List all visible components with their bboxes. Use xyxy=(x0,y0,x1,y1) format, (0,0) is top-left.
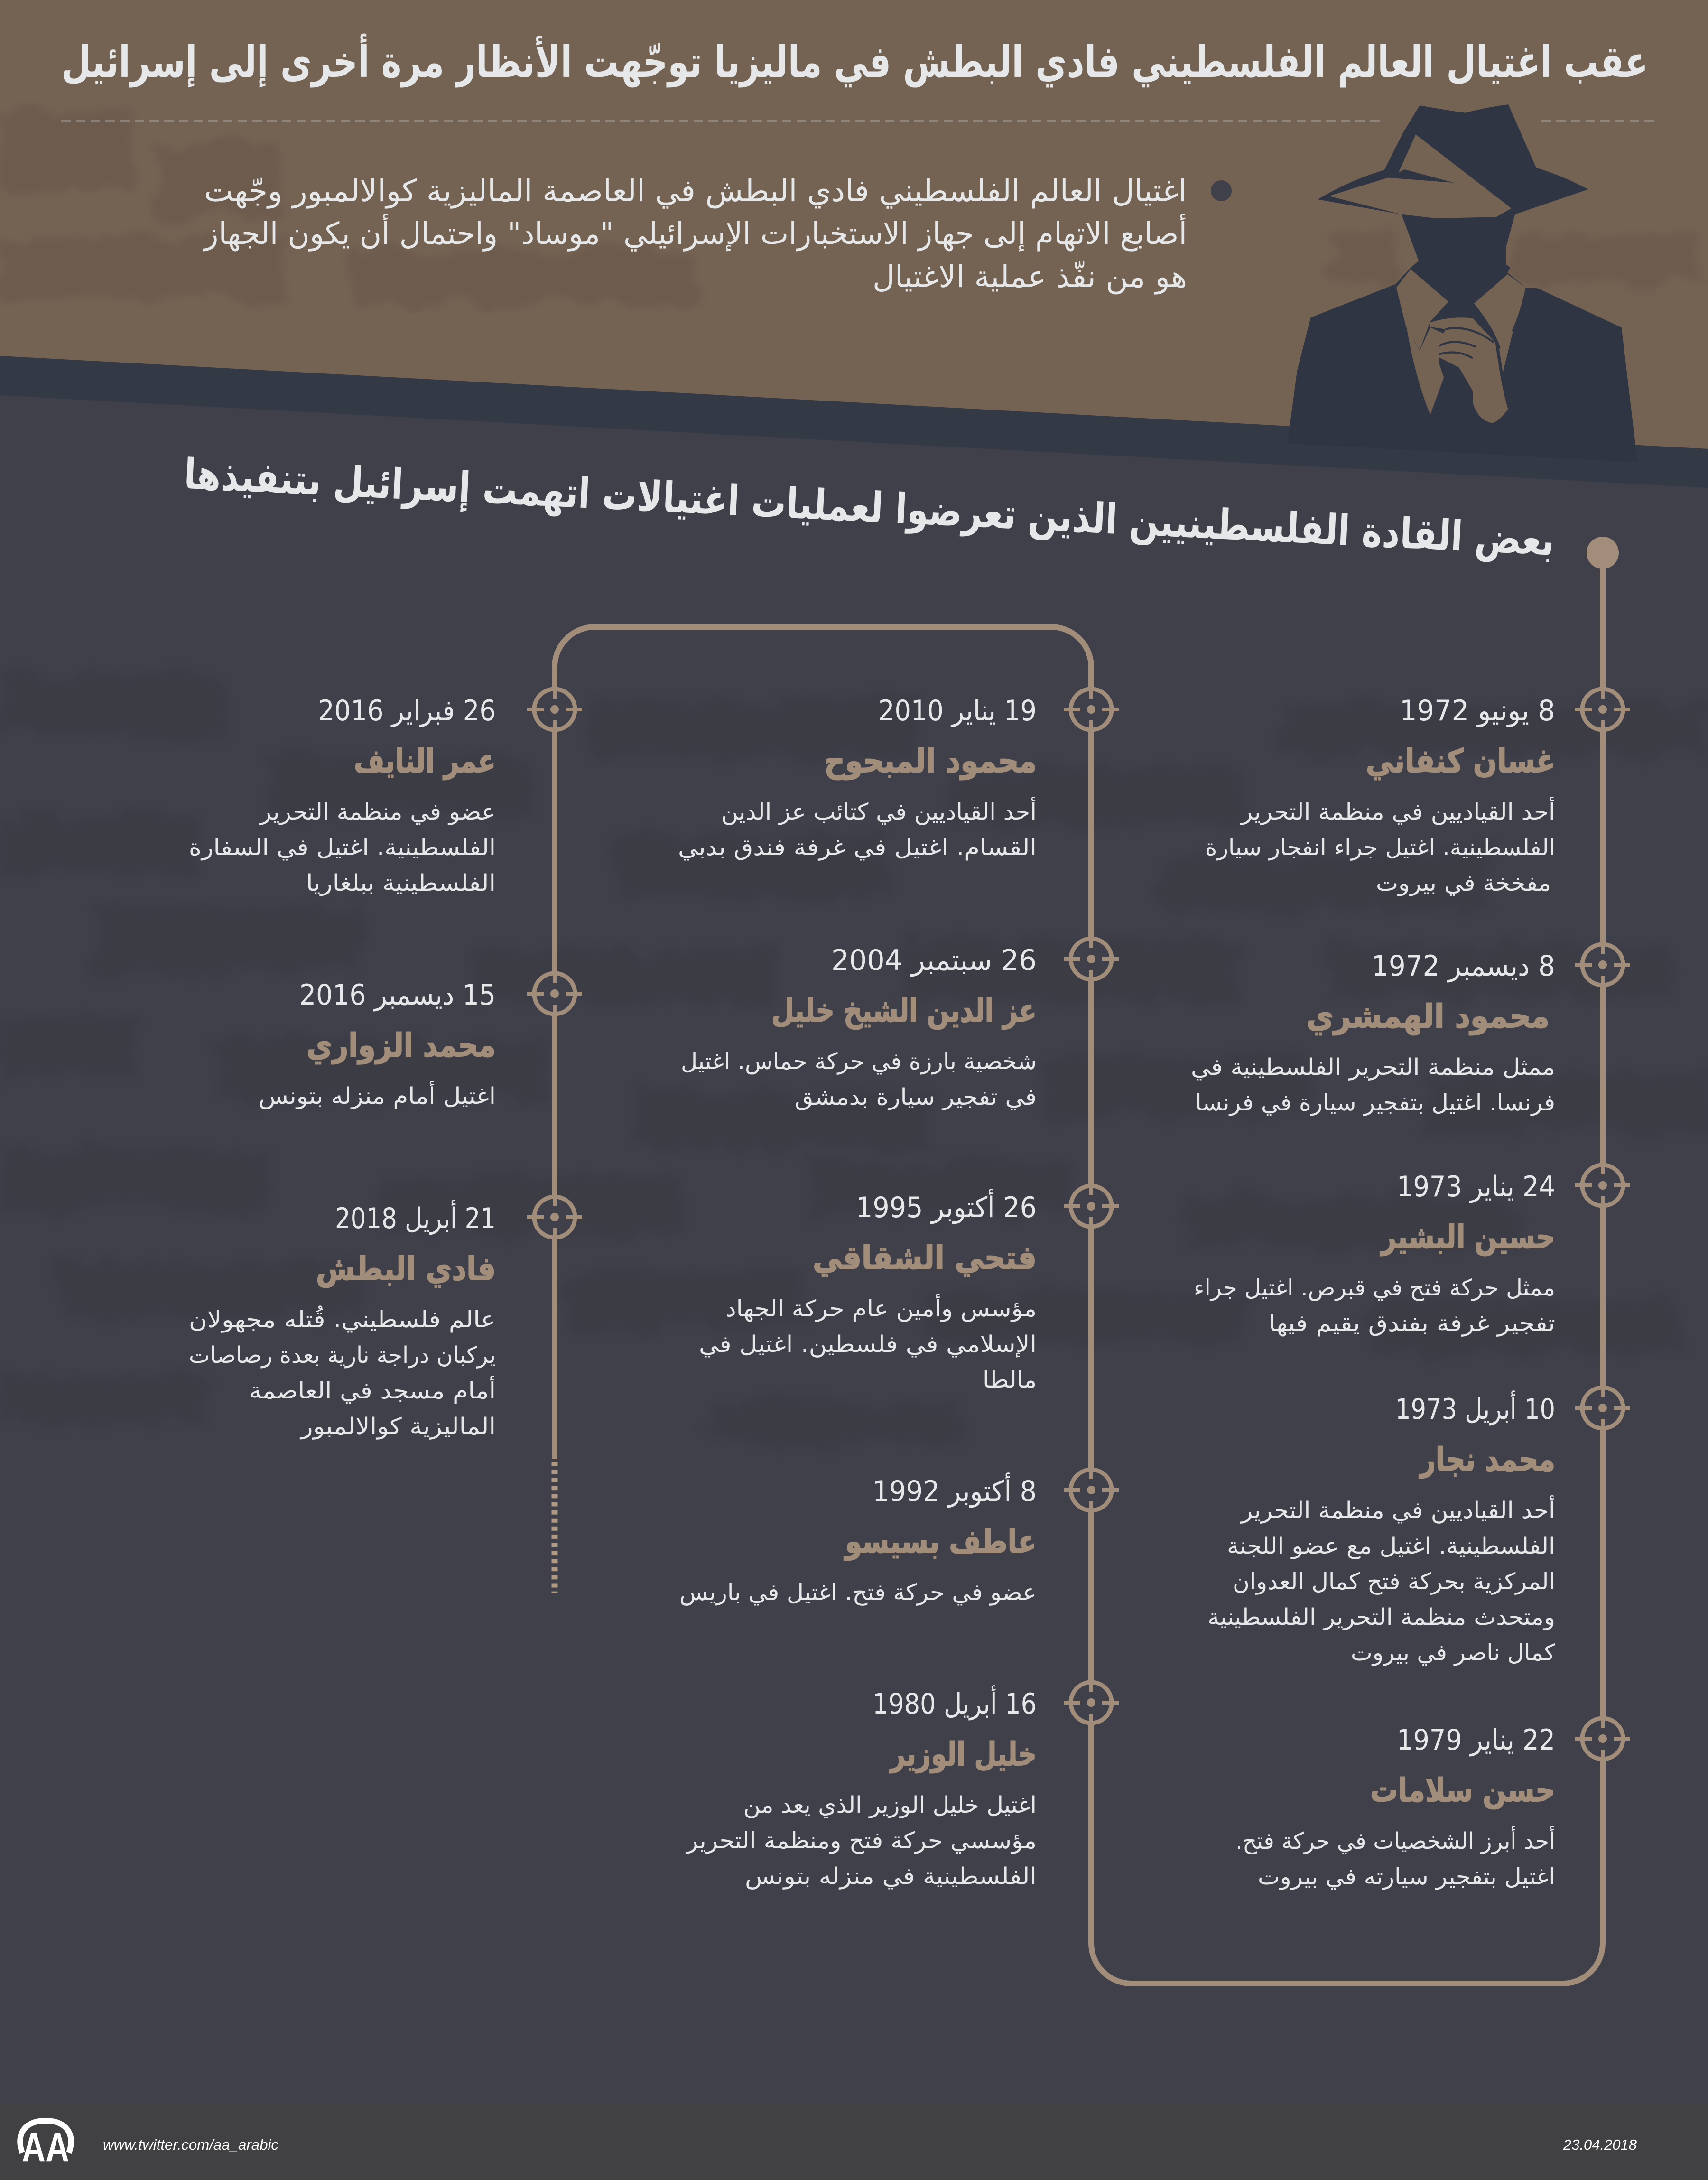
footer date: 23.04.2018 xyxy=(1563,2136,1637,2153)
entry: Khalil al-Wazir: اغتيل خليل الوزير الذي يعد من xyxy=(743,1792,1037,1818)
entry: Mahmoud Hamshari: محمود الهمشري xyxy=(1306,998,1550,1035)
entry: Ghassan Kanafani xyxy=(1205,694,1555,896)
entry: Hassan Salameh: اغتيل بتفجير سيارته في بيروت xyxy=(1258,1863,1555,1890)
footer band xyxy=(0,2103,1708,2180)
entry: Mahmoud Hamshari: 8 ديسمبر 1972 xyxy=(1372,950,1555,983)
entry: Izz al-Din Khalil: في تفجير سيارة بدمشق xyxy=(795,1084,1037,1110)
entry: Mohamed Zouari: 15 ديسمبر 2016 xyxy=(299,978,496,1012)
panel: brown header xyxy=(0,0,1708,449)
entry: Mohamed Zouari: محمد الزواري xyxy=(306,1027,496,1064)
entry: Hussein al-Bashir: تفجير غرفة بفندق يقيم فيها xyxy=(1269,1310,1555,1337)
entry: Fadi al-Batsh xyxy=(189,1200,496,1440)
entry: Ghassan Kanafani: الفلسطينية. اغتيل جراء انفجار سيارة xyxy=(1205,834,1555,861)
entry: Fathi Shaqaqi: 26 أكتوبر 1995 xyxy=(856,1189,1037,1224)
entry: Fadi al-Batsh: أمام مسجد في العاصمة xyxy=(249,1376,496,1404)
entry: Khalil al-Wazir: مؤسسي حركة فتح ومنظمة التحرير xyxy=(686,1827,1037,1854)
entry: Hussein al-Bashir: ممثل حركة فتح في قبرص. اغتيل جراء xyxy=(1194,1275,1555,1301)
icon: spy silhouette xyxy=(1288,104,1637,462)
entry: Hussein al-Bashir xyxy=(1194,1170,1555,1337)
dark brick texture xyxy=(0,674,1708,1447)
entry: Fathi Shaqaqi: الإسلامي في فلسطين. اغتيل في xyxy=(699,1331,1037,1358)
entry: Muhammad Najjar: أحد القياديين في منظمة التحرير xyxy=(1240,1495,1555,1524)
entry: Mahmoud al-Mabhouh: القسام. اغتيل في غرفة فندق بدبي xyxy=(678,834,1037,861)
entry: Mahmoud al-Mabhouh: محمود المبحوح xyxy=(824,743,1037,780)
entry: Atef Bseiso: 8 أكتوبر 1992 xyxy=(873,1472,1037,1508)
entry: Fathi Shaqaqi: فتحي الشقاقي xyxy=(813,1239,1037,1277)
entry: Fadi al-Batsh: عالم فلسطيني. قُتله مجهولان xyxy=(189,1305,496,1333)
entry: Fathi Shaqaqi: مؤسس وأمين عام حركة الجهاد xyxy=(725,1294,1037,1322)
entry: Izz al-Din Khalil: شخصية بارزة في حركة حماس. اغتيل xyxy=(681,1048,1037,1075)
entry: Hussein al-Bashir: حسين البشير xyxy=(1380,1219,1555,1256)
intro text with bullet: اغتيال العالم الفلسطيني فادي البطش في العاصمة الماليزية كوالالمبور وجّهت xyxy=(204,174,1187,209)
entry: Fadi al-Batsh: 21 أبريل 2018 xyxy=(335,1200,496,1235)
entry: Omar Nayef: الفلسطينية. اغتيل في السفارة xyxy=(189,834,496,861)
entry: Izz al-Din Khalil: 26 سبتمبر 2004 xyxy=(831,944,1037,977)
entry: Hassan Salameh: أحد أبرز الشخصيات في حركة فتح. xyxy=(1235,1826,1555,1854)
timeline markers xyxy=(527,688,1630,1760)
entry: Atef Bseiso: عاطف بسيسو xyxy=(844,1523,1037,1561)
entry: Mahmoud al-Mabhouh: 19 يناير 2010 xyxy=(878,694,1037,727)
entry: Omar Nayef xyxy=(189,694,496,896)
entry: Mohamed Zouari xyxy=(259,978,496,1109)
entry: Ghassan Kanafani: غسان كنفاني xyxy=(1366,743,1555,780)
diagonal navy band xyxy=(0,356,1708,488)
entry: Ghassan Kanafani: 8 يونيو 1972 xyxy=(1400,694,1555,727)
entry: Muhammad Najjar: 10 أبريل 1973 xyxy=(1395,1390,1555,1426)
entry: Ghassan Kanafani: مفخخة في بيروت xyxy=(1376,870,1551,896)
entry: Fadi al-Batsh: فادي البطش xyxy=(316,1250,496,1288)
icon: AA logo: AA xyxy=(22,2125,69,2171)
entry: Muhammad Najjar: الفلسطينية. اغتيل مع عضو اللجنة xyxy=(1227,1533,1555,1559)
entry: Muhammad Najjar: المركزية بحركة فتح كمال العدوان xyxy=(1233,1568,1555,1595)
entry: Hassan Salameh: 22 يناير 1979 xyxy=(1397,1724,1555,1757)
entry: Omar Nayef: عضو في منظمة التحرير xyxy=(259,799,496,825)
entry: Mahmoud al-Mabhouh: أحد القياديين في كتائب عز الدين xyxy=(721,797,1037,825)
entry: Khalil al-Wazir: 16 أبريل 1980 xyxy=(873,1685,1037,1721)
entry: Muhammad Najjar: ومتحدث منظمة التحرير الفلسطينية xyxy=(1207,1604,1555,1630)
entry: Omar Nayef: الفلسطينية ببلغاريا xyxy=(306,870,496,896)
entry: Muhammad Najjar: محمد نجار xyxy=(1419,1441,1555,1479)
entry: Atef Bseiso xyxy=(679,1472,1037,1606)
intro text with bullet xyxy=(203,174,1232,295)
entry: Hassan Salameh: حسن سلامات xyxy=(1370,1772,1555,1809)
entry: Hassan Salameh xyxy=(1235,1724,1555,1890)
entry: Fadi al-Batsh: يركبان دراجة نارية بعدة رصاصات xyxy=(189,1342,496,1369)
entry: Mahmoud Hamshari: ممثل منظمة التحرير الفلسطينية في xyxy=(1191,1054,1555,1081)
entry: Khalil al-Wazir xyxy=(686,1685,1037,1890)
entry: Mahmoud al-Mabhouh xyxy=(678,694,1037,861)
entry: Omar Nayef: 26 فبراير 2016 xyxy=(318,694,496,727)
timeline path xyxy=(555,537,1619,1984)
entry: Khalil al-Wazir: الفلسطينية في منزله بتونس xyxy=(745,1863,1037,1890)
entry: Muhammad Najjar xyxy=(1207,1390,1555,1666)
entry: Fathi Shaqaqi xyxy=(699,1189,1037,1393)
entry: Khalil al-Wazir: خليل الوزير xyxy=(890,1736,1037,1773)
footer link: www.twitter.com/aa_arabic xyxy=(103,2136,278,2153)
entry: Fadi al-Batsh: الماليزية كوالالمبور xyxy=(300,1413,496,1440)
entry: Mahmoud Hamshari xyxy=(1191,950,1555,1116)
entry: Omar Nayef: عمر النايف xyxy=(354,743,496,780)
entry: Mahmoud Hamshari: فرنسا. اغتيل بتفجير سيارة في فرنسا xyxy=(1195,1090,1555,1116)
intro text with bullet: أصابع الاتهام إلى جهاز الاستخبارات الإسرائيلي "موساد" واحتمال أن يكون الجهاز xyxy=(203,214,1187,252)
entry: Hussein al-Bashir: 24 يناير 1973 xyxy=(1397,1170,1555,1203)
entry: Izz al-Din Khalil xyxy=(681,944,1037,1110)
entry: Muhammad Najjar: كمال ناصر في بيروت xyxy=(1351,1640,1555,1666)
entry: Izz al-Din Khalil: عز الدين الشيخ خليل xyxy=(771,992,1037,1030)
intro text with bullet: هو من نفّذ عملية الاغتيال xyxy=(873,260,1187,295)
entry: Ghassan Kanafani: أحد القياديين في منظمة التحرير xyxy=(1240,797,1555,825)
entry: Atef Bseiso: عضو في حركة فتح. اغتيل في باريس xyxy=(679,1579,1037,1606)
entry: Mohamed Zouari: اغتيل أمام منزله بتونس xyxy=(259,1081,496,1109)
entry: Fathi Shaqaqi: مالطا xyxy=(983,1367,1037,1393)
